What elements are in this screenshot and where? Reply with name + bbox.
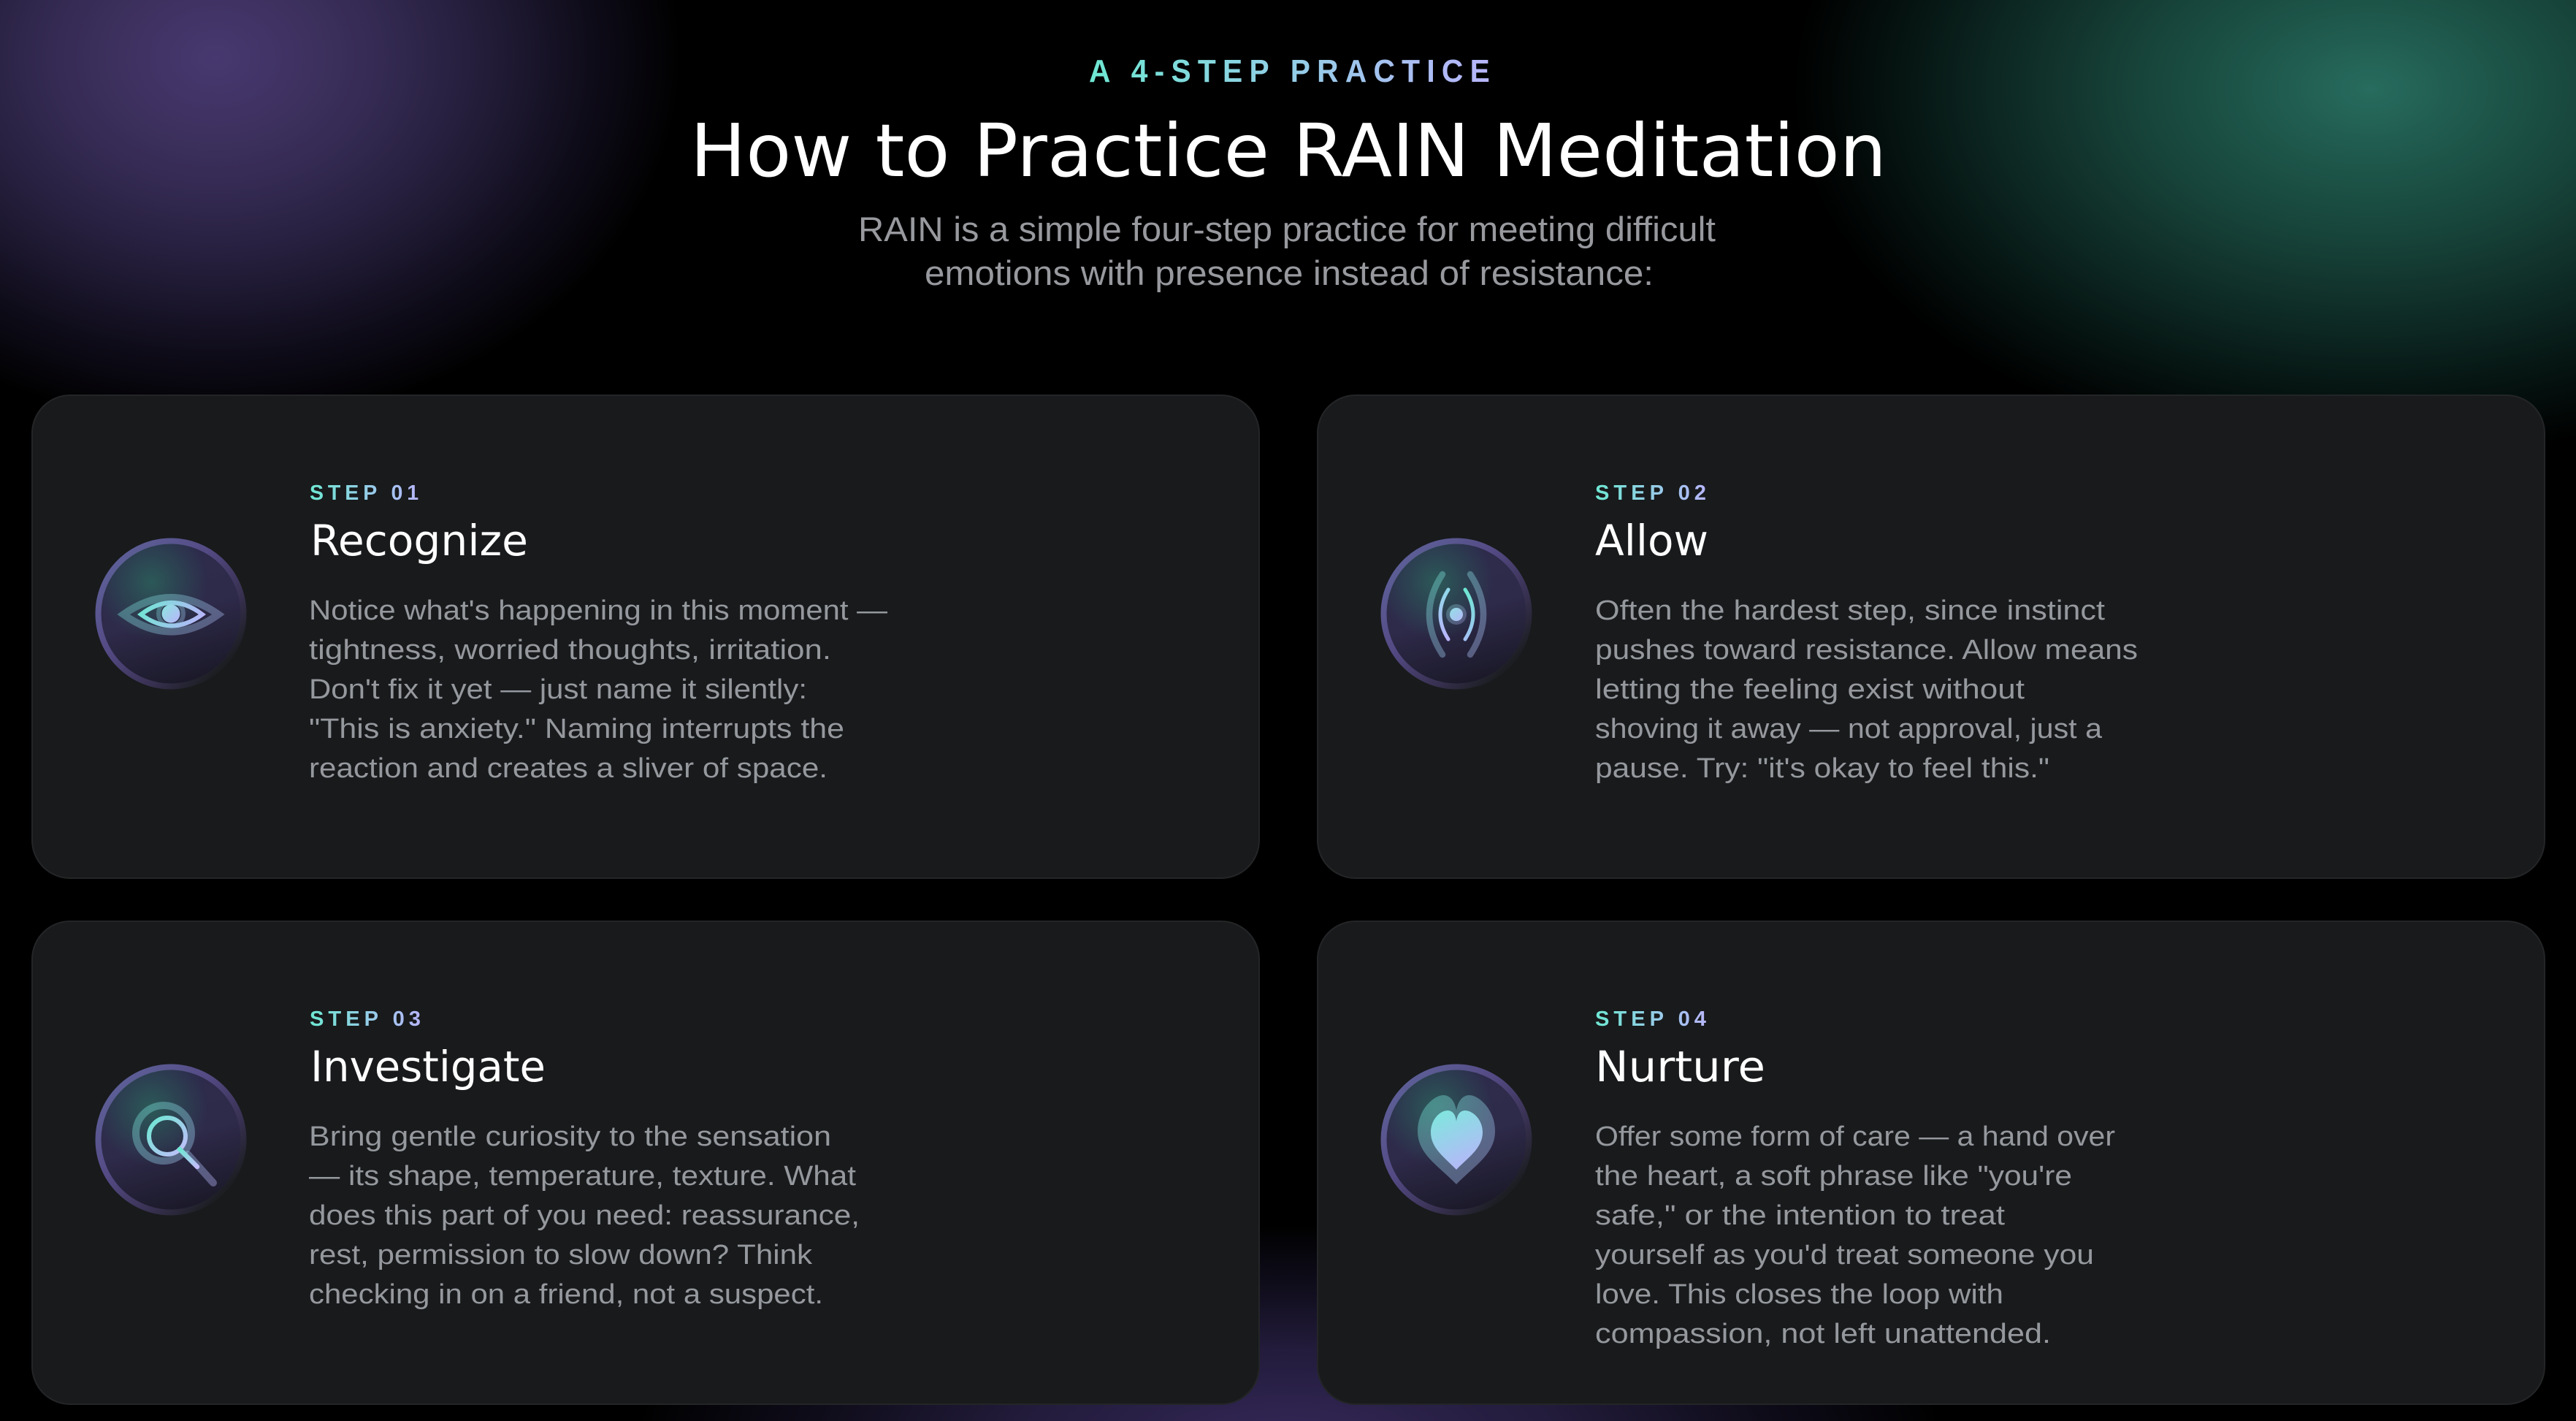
panel: step 02 allow bbox=[1318, 395, 2545, 878]
step description: safe," or the intention to treat bbox=[1595, 1200, 2006, 1231]
step description: rest, permission to slow down? Think bbox=[309, 1240, 813, 1270]
step description: Often the hardest step, since instinct bbox=[1595, 595, 2105, 626]
eyebrow label: A 4-STEP PRACTICE bbox=[1089, 53, 1497, 89]
step description bbox=[309, 595, 887, 784]
icon: heart bbox=[1383, 1067, 1529, 1213]
step heading: Allow bbox=[1595, 516, 1708, 565]
green glow top right bbox=[1789, 0, 2576, 468]
step description: tightness, worried thoughts, irritation. bbox=[309, 635, 831, 666]
subtitle: RAIN is a simple four-step practice for meeting difficult bbox=[858, 210, 1716, 248]
step label: STEP 01 bbox=[310, 481, 423, 505]
step description: pause. Try: "it's okay to feel this." bbox=[1595, 753, 2049, 784]
step heading: Nurture bbox=[1595, 1042, 1765, 1092]
icon: vibrating arcs bbox=[1383, 541, 1529, 687]
step description: Don't fix it yet — just name it silently: bbox=[309, 674, 807, 705]
title: How to Practice RAIN Meditation bbox=[690, 108, 1887, 194]
step description: compassion, not left unattended. bbox=[1595, 1319, 2051, 1349]
step description: Bring gentle curiosity to the sensation bbox=[309, 1121, 831, 1152]
step description: does this part of you need: reassurance, bbox=[309, 1200, 860, 1231]
step description: — its shape, temperature, texture. What bbox=[309, 1161, 856, 1192]
step label: STEP 04 bbox=[1595, 1007, 1711, 1031]
panel: step 01 recognize bbox=[32, 395, 1259, 878]
step description: letting the feeling exist without bbox=[1595, 674, 2025, 705]
step description: checking in on a friend, not a suspect. bbox=[309, 1279, 823, 1310]
step description: reaction and creates a sliver of space. bbox=[309, 753, 828, 784]
purple glow bottom center bbox=[628, 1220, 1950, 1421]
panel: step 04 nurture bbox=[1318, 921, 2545, 1404]
icon: eye bbox=[98, 541, 244, 687]
step label: STEP 02 bbox=[1595, 481, 1711, 505]
step label: STEP 03 bbox=[310, 1007, 425, 1031]
subtitle bbox=[858, 210, 1716, 292]
step description bbox=[1595, 1121, 2115, 1349]
step description: Notice what's happening in this moment — bbox=[309, 595, 887, 626]
step description: love. This closes the loop with bbox=[1595, 1279, 2003, 1310]
step description: the heart, a soft phrase like "you're bbox=[1595, 1161, 2072, 1192]
step heading: Recognize bbox=[310, 516, 528, 565]
step description bbox=[309, 1121, 860, 1310]
step heading: Investigate bbox=[310, 1042, 546, 1092]
step description: "This is anxiety." Naming interrupts the bbox=[309, 714, 844, 744]
purple glow top left bbox=[0, 0, 687, 431]
header bbox=[690, 53, 1887, 292]
icon: magnifying glass bbox=[98, 1067, 244, 1213]
panel: step 03 investigate bbox=[32, 921, 1259, 1404]
step description bbox=[1595, 595, 2138, 784]
step description: Offer some form of care — a hand over bbox=[1595, 1121, 2115, 1152]
step description: yourself as you'd treat someone you bbox=[1595, 1240, 2094, 1270]
step description: pushes toward resistance. Allow means bbox=[1595, 635, 2138, 666]
subtitle: emotions with presence instead of resistance: bbox=[925, 254, 1654, 292]
step description: shoving it away — not approval, just a bbox=[1595, 714, 2103, 744]
